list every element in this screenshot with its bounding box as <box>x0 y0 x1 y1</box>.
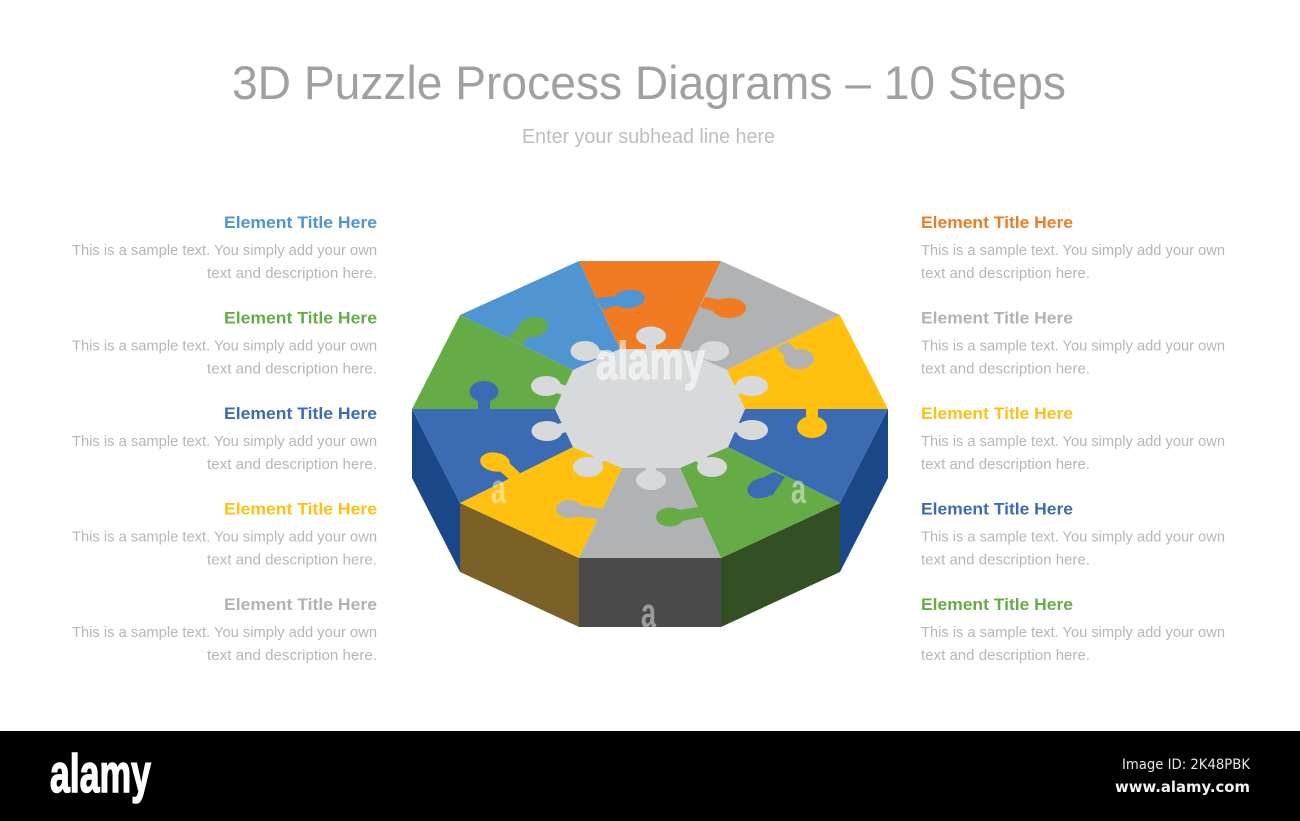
left item 5: This is a sample text. You simply add your own <box>72 625 377 641</box>
right item 5: Element Title Here <box>921 595 1073 614</box>
image id: Image ID: 2K48PBK <box>1122 757 1250 773</box>
right item 1: Element Title Here <box>921 213 1073 232</box>
right item 3: Element Title Here <box>921 404 1073 423</box>
left item 3: This is a sample text. You simply add your own <box>72 434 377 450</box>
right item 1: text and description here. <box>921 266 1090 282</box>
side faces <box>412 409 888 627</box>
right item 5: text and description here. <box>921 648 1090 664</box>
small watermark marks: a <box>641 589 656 636</box>
right item 2: This is a sample text. You simply add your own <box>921 338 1225 354</box>
left item 3 <box>72 404 377 473</box>
left item 4: Element Title Here <box>224 500 377 518</box>
right item 2 <box>921 308 1225 378</box>
subhead: Enter your subhead line here <box>522 126 775 148</box>
right item 4: This is a sample text. You simply add your own <box>921 530 1225 546</box>
right item 5 <box>921 595 1225 664</box>
website: www.alamy.com <box>1115 778 1250 796</box>
footer bar <box>0 731 1300 821</box>
left item 5 <box>72 595 377 664</box>
right item 1 <box>921 213 1225 282</box>
right item 4: Element Title Here <box>921 500 1073 518</box>
left item 2 <box>72 308 377 378</box>
left item 5: text and description here. <box>207 648 377 664</box>
left item 4 <box>72 500 377 568</box>
left item 3: text and description here. <box>207 457 377 473</box>
puzzle pieces, top face <box>412 261 888 558</box>
left item 2: Element Title Here <box>224 308 377 328</box>
footer logo: alamy <box>50 744 151 804</box>
right item 3 <box>921 404 1225 473</box>
right item 1: This is a sample text. You simply add your own <box>921 243 1225 259</box>
watermarks <box>491 332 806 636</box>
left item 1 <box>72 213 377 282</box>
right item 3: text and description here. <box>921 457 1090 473</box>
left text column <box>72 213 377 664</box>
small watermark marks <box>491 465 806 636</box>
left item 2: text and description here. <box>207 362 377 378</box>
title: 3D Puzzle Process Diagrams – 10 Steps <box>232 56 1066 109</box>
small watermark marks: a <box>491 465 506 512</box>
left item 2: This is a sample text. You simply add your own <box>72 338 377 354</box>
left item 4: text and description here. <box>207 552 377 568</box>
right item 3: This is a sample text. You simply add your own <box>921 434 1225 450</box>
small watermark marks: a <box>791 465 806 512</box>
3D puzzle diagram <box>412 261 888 627</box>
right item 2: text and description here. <box>921 362 1090 378</box>
puzzle tabs between pieces <box>470 289 827 526</box>
right item 2: Element Title Here <box>921 308 1073 328</box>
left item 5: Element Title Here <box>224 595 377 614</box>
right item 4: text and description here. <box>921 552 1090 568</box>
left item 1: Element Title Here <box>224 213 377 232</box>
left item 1: text and description here. <box>207 266 377 282</box>
right item 5: This is a sample text. You simply add your own <box>921 625 1225 641</box>
left item 3: Element Title Here <box>224 404 377 423</box>
left item 1: This is a sample text. You simply add your own <box>72 243 377 259</box>
right item 4 <box>921 500 1225 568</box>
centre watermark: alamy <box>596 332 705 391</box>
centre hub with tabs <box>531 326 768 490</box>
left item 4: This is a sample text. You simply add your own <box>72 530 377 546</box>
right text column <box>921 213 1225 664</box>
